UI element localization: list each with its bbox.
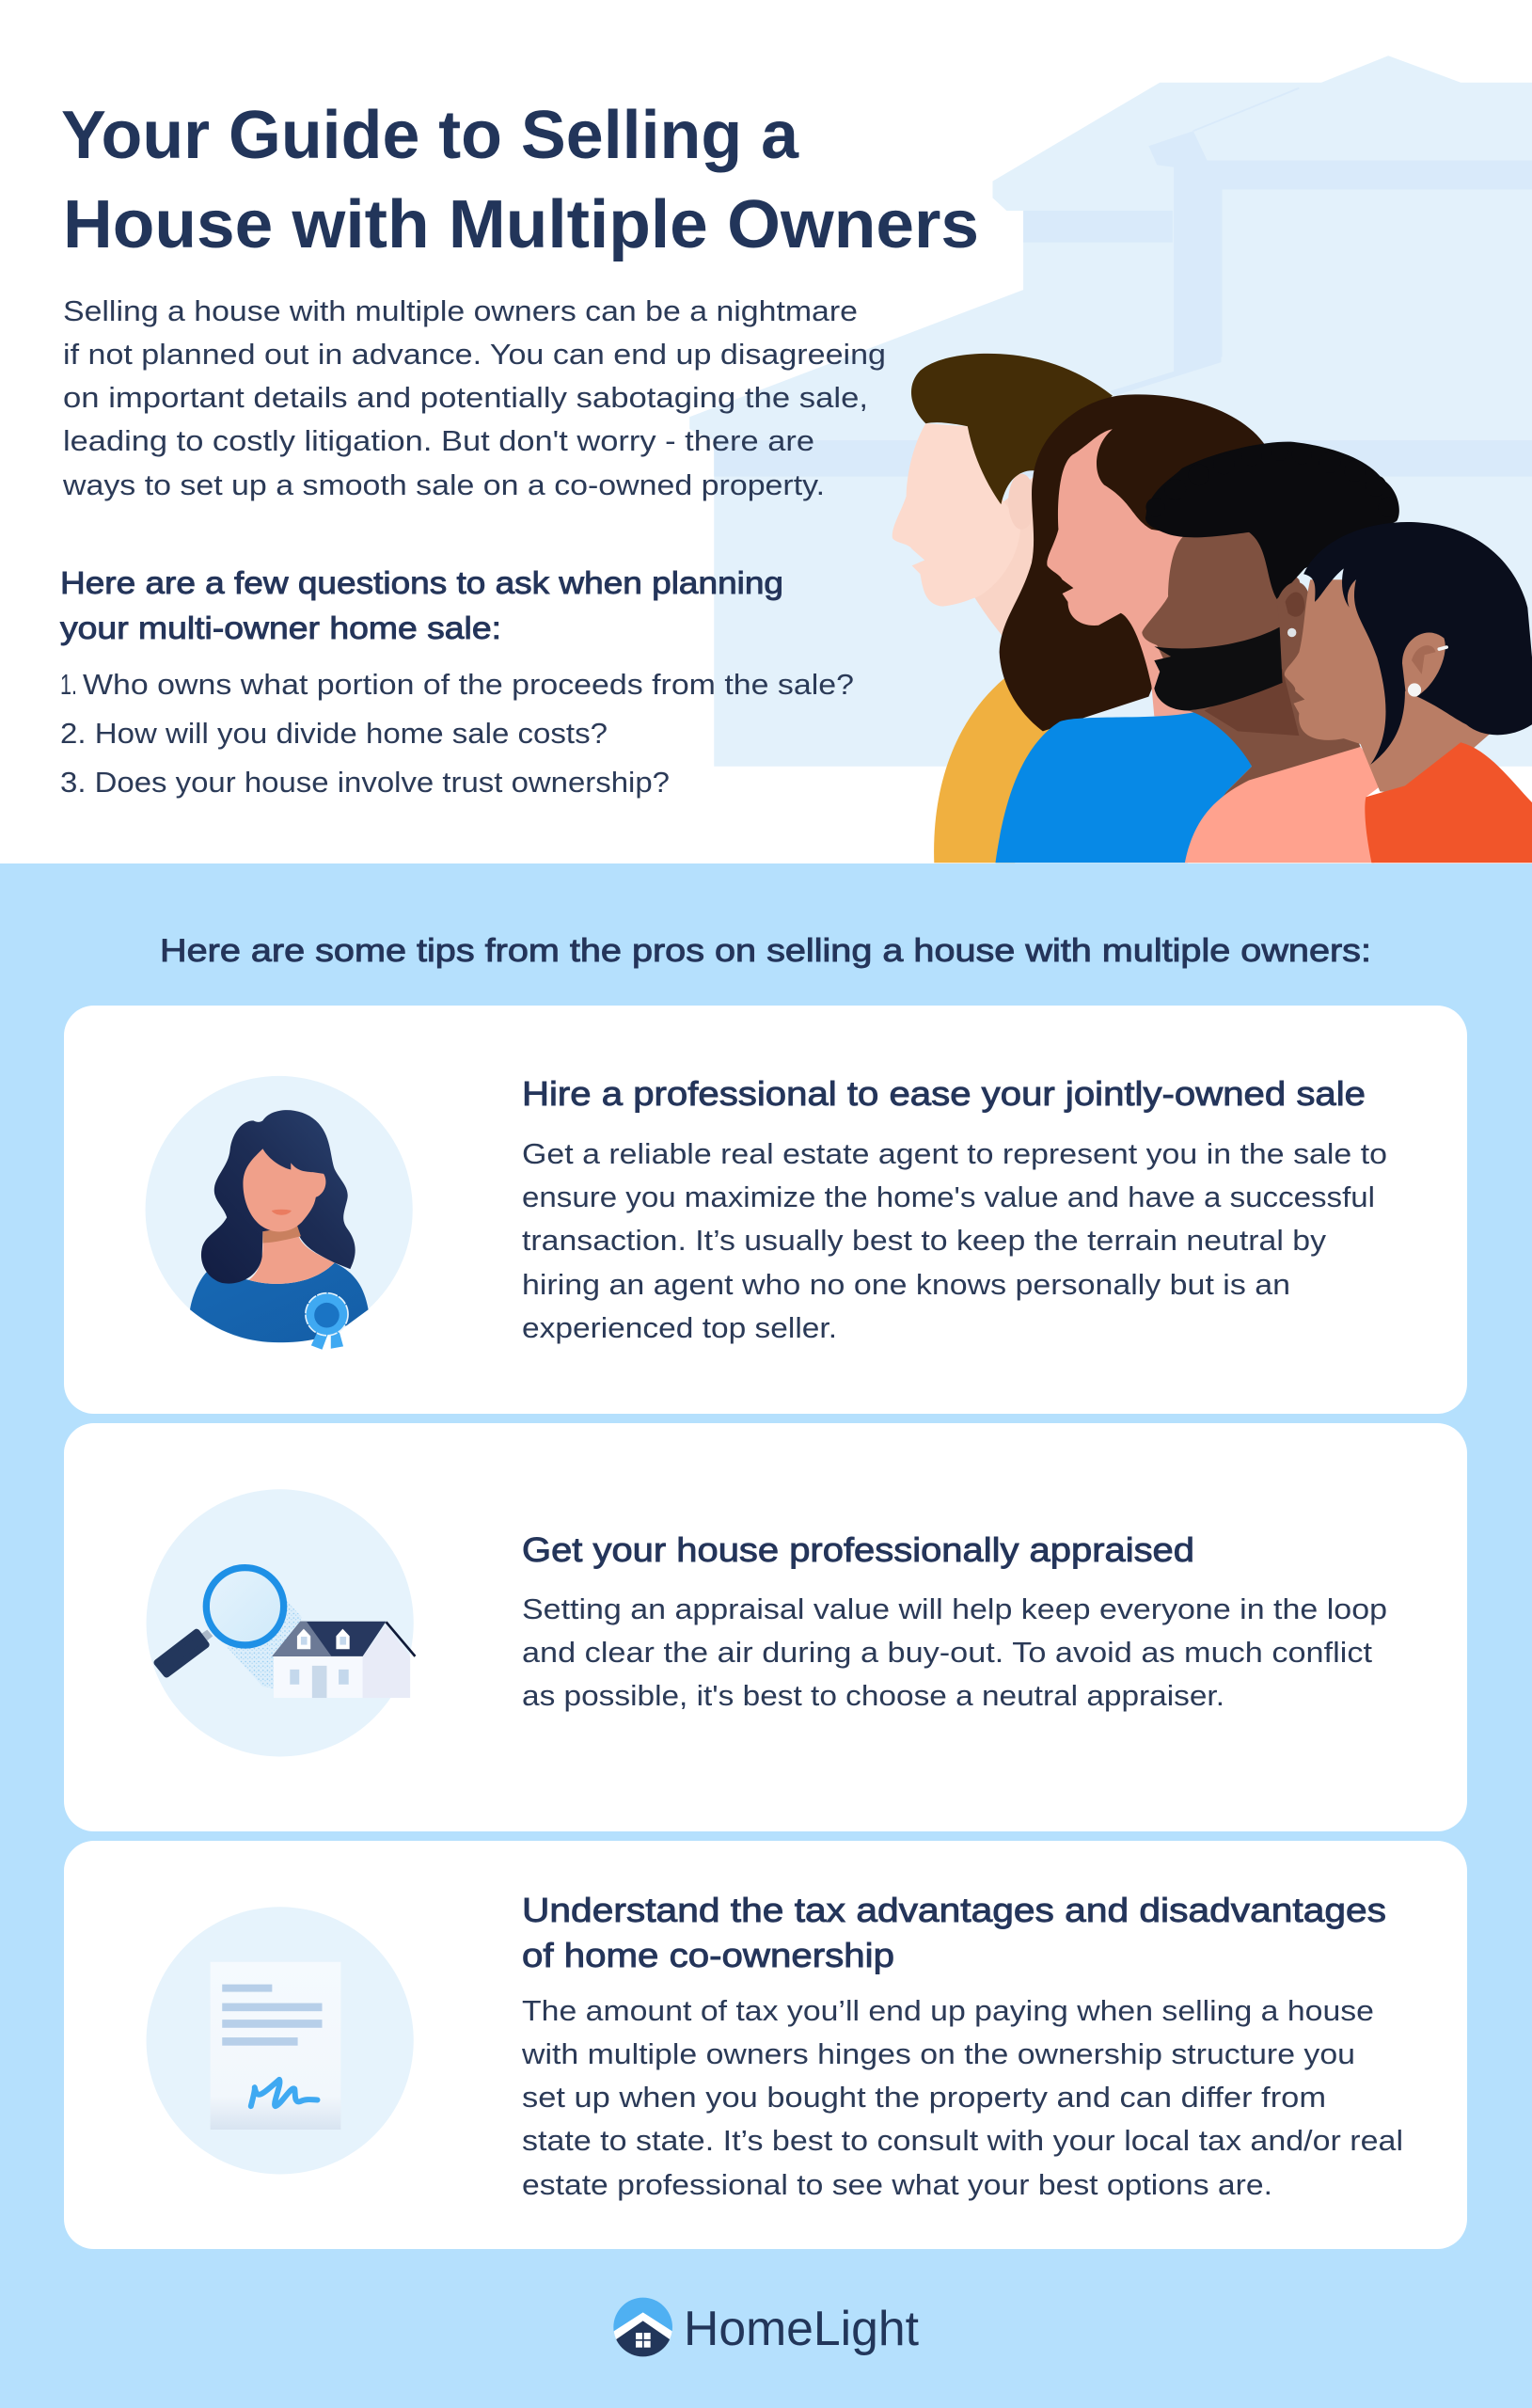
body text: appraisal	[522, 1592, 1387, 1712]
person: man with beard and curly hair	[1142, 442, 1399, 819]
questions list: 1.	[60, 668, 77, 701]
questions list: 2. How will you divide home sale costs?	[60, 717, 608, 750]
icon: agent woman with ribbon	[146, 1076, 413, 1350]
questions list: Who owns what portion of the proceeds from the sale?	[83, 668, 854, 701]
body text: tax advantages	[521, 1994, 1403, 2201]
intro paragraph: if not planned out in advance. You can end up disagreeing	[63, 338, 886, 371]
body text: hire a professional: hiring an agent who no one knows personally but is an	[522, 1268, 1290, 1301]
title: House with Multiple Owners	[63, 187, 979, 262]
heading: appraisal: Get your house professionally appraised	[522, 1530, 1194, 1569]
body text: tax advantages: estate professional to see what your best options are.	[522, 2168, 1272, 2201]
questions list	[60, 668, 854, 799]
intro paragraph: ways to set up a smooth sale on a co-owned property.	[62, 468, 825, 501]
body text: hire a professional	[522, 1137, 1387, 1344]
title: Your Guide to Selling a	[61, 98, 799, 173]
questions heading: Here are a few questions to ask when planning	[60, 565, 783, 600]
panel: hire a professional	[64, 1006, 1467, 1414]
heading: tax advantages	[522, 1891, 1386, 1974]
body text: hire a professional: Get a reliable real estate agent to represent you in the sale to	[522, 1137, 1387, 1170]
body text: tax advantages: with multiple owners hinges on the ownership structure you	[521, 2037, 1355, 2070]
intro paragraph: Selling a house with multiple owners can be a nightmare	[63, 294, 858, 327]
heading: tax advantages: Understand the tax advantages and disadvantages	[522, 1891, 1386, 1929]
body text: appraisal: and clear the air during a buy-out. To avoid as much conflict	[522, 1636, 1372, 1669]
title	[61, 98, 979, 262]
icon: signed document	[147, 1907, 414, 2174]
body text: tax advantages: state to state. It’s best to consult with your local tax and/or real	[522, 2124, 1403, 2157]
body text: hire a professional: transaction. It’s usually best to keep the terrain neutral by	[522, 1224, 1327, 1257]
questions heading: your multi-owner home sale:	[60, 610, 501, 645]
body text: appraisal: as possible, it's best to choose a neutral appraiser.	[522, 1679, 1224, 1712]
peach shirt	[1185, 747, 1388, 863]
intro paragraph: on important details and potentially sabotaging the sale,	[63, 381, 868, 414]
logo: HomeLight	[611, 2295, 920, 2359]
panel: tax advantages	[64, 1841, 1467, 2249]
heading: hire a professional: Hire a professional to ease your jointly-owned sale	[522, 1074, 1366, 1113]
questions list: 3. Does your house involve trust ownership?	[60, 766, 670, 799]
house silhouette	[689, 55, 1532, 767]
questions heading	[60, 565, 783, 645]
body text: hire a professional: experienced top seller.	[522, 1311, 837, 1344]
person: woman with long brown hair	[995, 394, 1271, 863]
person: man with brown hair	[892, 354, 1113, 863]
body text: hire a professional: ensure you maximize the home's value and have a successful	[522, 1180, 1375, 1213]
icon: magnifier and house	[147, 1489, 415, 1756]
intro paragraph	[62, 294, 886, 501]
illustration: house silhouette and four people	[689, 55, 1532, 863]
tips heading: Here are some tips from the pros on selling a house with multiple owners:	[160, 933, 1371, 969]
body text: tax advantages: set up when you bought the property and can differ from	[522, 2081, 1326, 2114]
panel: appraisal	[64, 1423, 1467, 1831]
person: woman with dark bun	[1285, 522, 1532, 863]
intro paragraph: leading to costly litigation. But don't worry - there are	[63, 424, 814, 457]
body text: appraisal: Setting an appraisal value will help keep everyone in the loop	[522, 1592, 1387, 1625]
heading: tax advantages: of home co-ownership	[522, 1936, 894, 1974]
blue tips section background	[0, 863, 1532, 2408]
body text: tax advantages: The amount of tax you’ll end up paying when selling a house	[522, 1994, 1374, 2027]
wordmark: HomeLight	[684, 2302, 920, 2356]
icon: HomeLight house mark	[613, 2297, 672, 2357]
